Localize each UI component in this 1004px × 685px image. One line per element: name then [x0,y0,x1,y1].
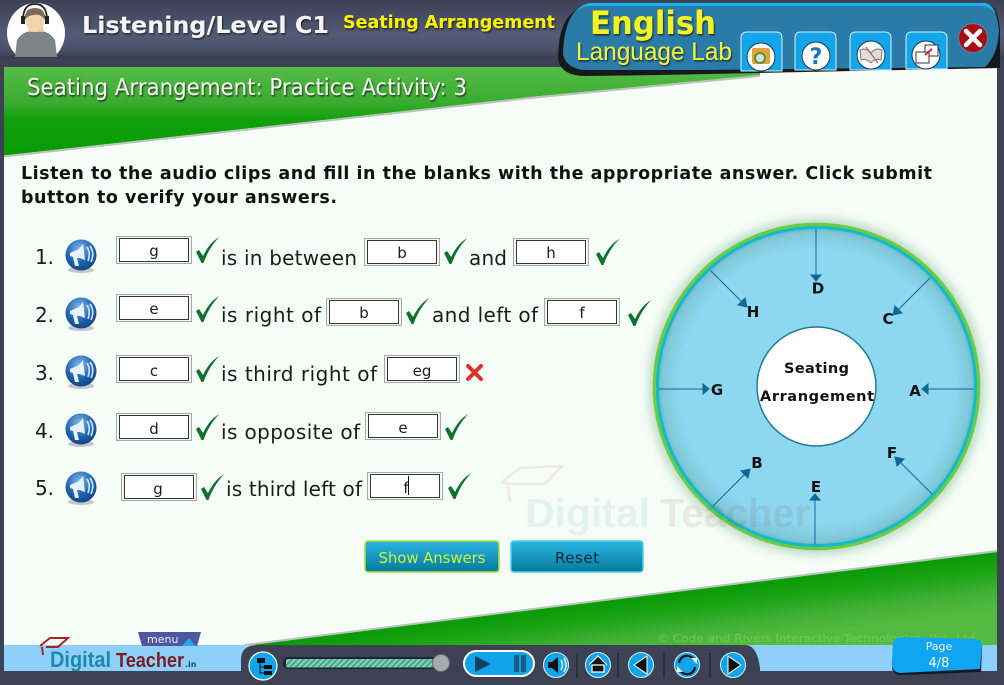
play and pause control [464,651,534,676]
button: Show Answers: Show Answers [378,549,486,567]
number 3: 3. [35,361,54,385]
question 1 [35,236,620,273]
audio icon 1 [66,240,96,273]
panel: English Language Lab toolbar [558,3,1000,76]
answer e: e [149,300,159,318]
watermark: Digital Teacher: Digital [525,490,650,536]
tree menu icon [249,652,277,680]
seat labels [711,280,921,496]
answer h: h [546,244,556,262]
chart: circular seating arrangement [648,218,984,554]
seat labels: F [887,444,897,462]
logo text: English: English [590,4,716,42]
tick [448,473,472,499]
tick [196,356,220,382]
seat labels: C [882,310,894,328]
wrong cross [468,366,481,379]
title: Listening/Level C1: Listening/Level C1 [82,13,329,39]
answer d [116,414,192,440]
green header band [4,67,760,156]
answer d: d [149,420,159,438]
bottom bar [0,671,1004,685]
centre label [760,361,874,405]
audio icon 4 [66,414,96,447]
media control bar [241,645,760,685]
audio icon 2 [66,298,96,331]
seat labels: G [711,381,723,399]
watermark: Digital Teacher [502,466,810,536]
question 4 [35,412,468,447]
question 5 [35,472,472,505]
tab: help [795,32,836,70]
instructions: button to verify your answers. [21,188,337,208]
seat labels: D [812,280,824,298]
top bar [0,2,1004,58]
tick [444,238,468,264]
number 5: 5. [35,476,54,500]
tick [196,237,220,263]
bottom band edge line [245,551,997,645]
tab: resize window [906,32,947,69]
heading: practice activity: Seating Arrangement: Practice Activity: 3 [27,73,467,101]
volume button [544,652,568,678]
text: is third left of: is third left of [226,477,363,501]
footer logo: Digital Teacher: .in [185,660,197,669]
answer f with cursor: f [403,479,409,497]
replay button [674,652,700,678]
page indicator: Page [926,640,953,653]
next button [720,652,746,678]
number 1: 1. [35,245,54,269]
answer b: b [397,244,407,262]
text: is right of: is right of [221,303,322,327]
footer logo: Digital Teacher: Digital [50,647,111,672]
answer f with cursor [368,472,442,500]
tab: recent activity [741,32,782,71]
answer e: e [398,419,408,437]
page indicator [892,637,982,675]
close button [958,24,988,52]
instructions: Listen to the audio clips and fill in the blanks with the appropriate answer. Click submit [21,164,932,184]
number 2: 2. [35,303,54,327]
audio icon 5 [66,472,96,505]
seat arrows [659,229,974,544]
button: Show Answers [365,541,499,572]
answer eg [384,356,460,382]
previous button [628,652,654,678]
footer logo: Digital Teacher: Teacher [116,650,184,672]
bottom green band [245,552,997,645]
tick [406,298,430,324]
text: is opposite of: is opposite of [221,420,361,444]
seat labels: B [751,454,763,472]
tick [596,239,620,265]
answer h [514,238,588,266]
tick [196,296,220,322]
button: Reset: Reset [555,549,599,567]
header band edge line [4,76,760,156]
footer logo: Digital Teacher [40,638,197,672]
answer f: f [579,304,585,322]
answer b: b [359,304,369,322]
tick [201,474,224,500]
question 2 [35,294,652,331]
tick [445,414,468,440]
text: is in between: is in between [221,246,357,270]
subtitle: Seating Arrangement: Seating Arrangement [343,12,555,33]
answer eg: eg [413,362,431,380]
menu tab [138,632,201,646]
tab: glossary book [850,32,891,70]
menu tab: menu [147,633,178,646]
text: is third right of: is third right of [221,362,378,386]
text: and: and [469,246,507,270]
answer g [116,236,192,264]
answer b [326,298,402,326]
page indicator: 4/8 [929,656,949,671]
question 3 [35,356,481,389]
centre label: Seating [784,361,849,377]
footer strip [4,645,997,671]
answer g: g [149,242,159,260]
text: and left of: and left of [432,303,539,327]
answer f [544,298,620,326]
answer c: c [150,362,158,380]
logo text: Language Lab: Language Lab [576,38,732,66]
answer g [122,474,196,500]
tick [628,300,652,326]
tick [196,414,220,440]
copyright: © Code and Rivers Interactive Technologies, Pvt. Ltd. [657,633,979,645]
seat labels: E [811,478,821,496]
answer g: g [153,480,163,498]
answer c [116,356,192,382]
answer e [366,412,440,440]
avatar: listener with headphones [7,3,65,63]
centre label: Arrangement [760,389,874,405]
progress slider [283,654,450,672]
seat labels: H [747,303,759,321]
tab: help: ? [810,45,822,70]
button: Reset [511,541,643,572]
number 4: 4. [35,419,54,443]
home button [586,652,610,678]
seat labels: A [909,382,921,400]
answer e [116,294,192,322]
answer b [364,238,440,266]
instructions [21,164,932,208]
audio icon 3 [66,356,96,389]
watermark: Digital Teacher: Teacher [660,490,810,536]
